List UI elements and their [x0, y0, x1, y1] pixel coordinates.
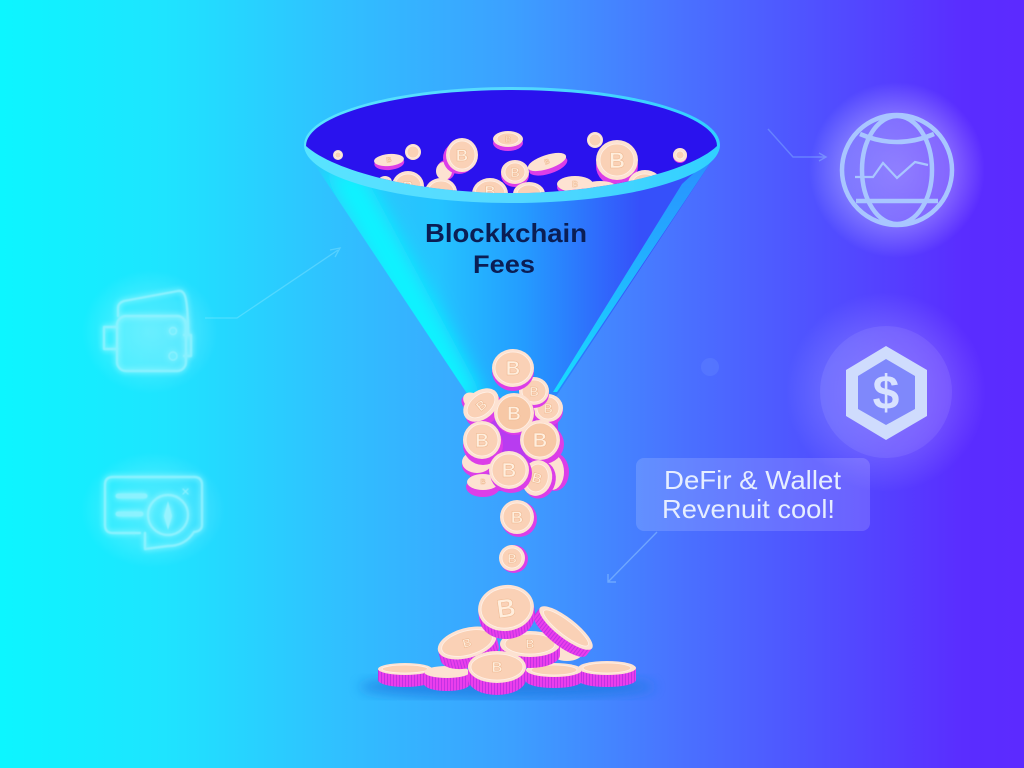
pile shadow — [359, 676, 655, 698]
coins inside funnel: B — [403, 178, 413, 194]
coins falling from funnel: B — [480, 479, 486, 486]
callout: DeFi and wallet revenue: Revenuit cool! — [662, 494, 835, 524]
faint dot — [701, 358, 719, 376]
coins falling from funnel: B — [507, 404, 521, 425]
coins falling from funnel: B — [506, 358, 520, 380]
arrow: funnel to globe — [768, 129, 826, 161]
funnel cone — [305, 150, 719, 398]
coins falling from funnel: B — [530, 469, 544, 487]
funnel — [304, 87, 720, 400]
icon: globe with chart line — [809, 82, 985, 258]
coins falling from funnel: B — [507, 551, 517, 566]
coins falling from funnel: B — [533, 430, 547, 452]
funnel rim — [304, 87, 720, 203]
coins inside funnel: B — [386, 157, 392, 164]
icon: wallet — [82, 270, 218, 394]
coins inside funnel: B — [505, 135, 511, 144]
coins falling from funnel: B — [511, 508, 523, 527]
funnel label: Blockkchain Fees — [425, 218, 587, 279]
coins falling from funnel: B — [543, 401, 553, 416]
funnel right highlight — [553, 150, 719, 392]
icon: message with compass — [81, 452, 225, 568]
coins inside funnel: B — [456, 146, 468, 165]
coins inside funnel: B — [544, 158, 551, 167]
coins falling from funnel: B — [473, 397, 490, 414]
coins inside funnel: B — [572, 180, 578, 189]
coin pile: B — [461, 635, 473, 651]
coins inside funnel: B — [485, 183, 496, 200]
coins falling from funnel: B — [475, 431, 489, 452]
funnel label: Blockkchain Fees: Fees — [473, 251, 535, 279]
coins inside funnel: B — [609, 148, 625, 173]
arrow: callout to pile — [608, 532, 657, 582]
coin pile: B — [495, 592, 517, 624]
callout: DeFi and wallet revenue — [636, 458, 870, 531]
coins falling from funnel: B — [502, 460, 516, 482]
coins inside funnel: B — [510, 165, 520, 180]
coins inside funnel — [333, 131, 687, 193]
coin pile: B — [492, 659, 503, 676]
funnel left cyan glow — [322, 170, 485, 400]
callout: DeFi and wallet revenue: DeFir & Wallet — [664, 465, 842, 495]
icon: hexagon dollar — [786, 292, 986, 492]
coin pile: B — [526, 637, 535, 651]
coins falling from funnel — [456, 349, 569, 573]
arrow: wallet to funnel — [205, 248, 340, 318]
magenta cluster backing — [470, 398, 558, 492]
funnel mouth — [306, 90, 717, 193]
coin pile — [359, 581, 655, 698]
icon: hexagon dollar: $ — [873, 367, 900, 420]
funnel label: Blockkchain Fees: Blockkchain — [425, 218, 587, 248]
coins falling from funnel: B — [529, 384, 539, 399]
